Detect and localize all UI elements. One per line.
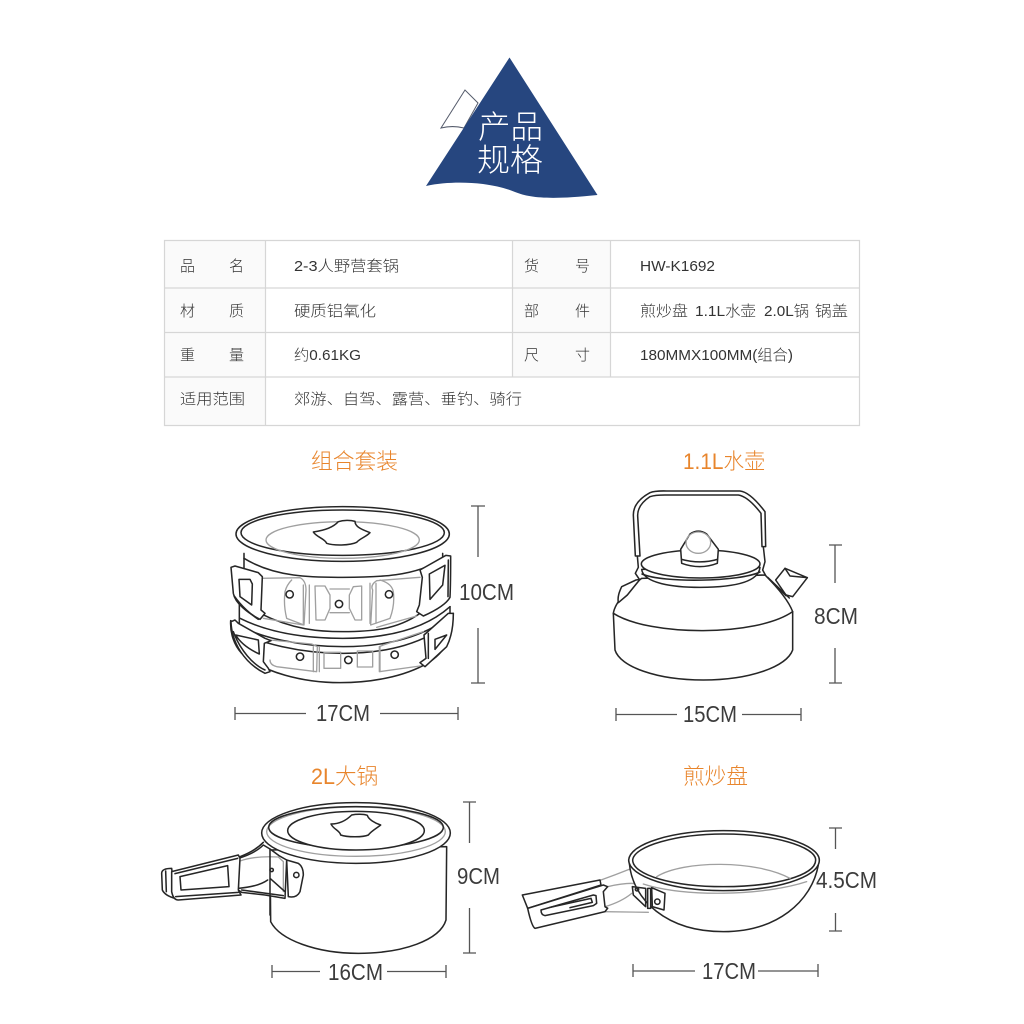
row: weight and size: 寸 (575, 347, 590, 364)
handle: pot folding handle (162, 842, 303, 915)
heading: kettle: 1.1L水壶 (683, 449, 765, 474)
pot rim (262, 803, 450, 863)
row: product name and item number: 号 (575, 258, 590, 275)
row: product name and item number (180, 258, 715, 275)
row: product name and item number: 品 (180, 258, 195, 275)
upper pot (231, 553, 451, 638)
row: material and parts: 硬质铝氧化 (294, 303, 376, 320)
dimension: kettle height (814, 545, 858, 683)
pan rim (629, 831, 819, 891)
panel: specification table (164, 240, 860, 426)
row: weight and size: 180MMX100MM(组合) (640, 347, 793, 364)
row: material and parts: 1.1L水壶 (695, 303, 756, 320)
row: weight and size (180, 347, 793, 364)
row: material and parts: 材 (180, 303, 195, 320)
row: weight and size: 尺 (524, 347, 539, 364)
rivets (286, 591, 393, 608)
row: material and parts: 锅盖 (815, 303, 848, 320)
dimension: kettle width (616, 701, 801, 727)
heading: combo set: 组合套装 (311, 449, 398, 474)
dimension: pan height (816, 828, 877, 931)
illustration: kettle (613, 491, 807, 680)
dimension: pot height (457, 802, 500, 953)
handle: lower left (231, 620, 271, 673)
pot body (270, 847, 447, 953)
kettle spout (776, 568, 807, 597)
heading: large pot: 2L大锅 (311, 764, 378, 789)
rivets (296, 651, 398, 664)
badge: mountain title (426, 58, 598, 198)
dimension: pan width: 17CM (702, 958, 756, 984)
icon: lid knob (313, 520, 370, 545)
row: product name and item number: 2-3人野营套锅 (294, 258, 399, 275)
handle: pan wire neck (601, 869, 652, 912)
kettle handle (633, 491, 767, 579)
row: material and parts: 质 (229, 303, 244, 320)
row: material and parts: 2.0L锅 (764, 303, 809, 320)
pan body (629, 863, 818, 932)
dimension: pot width (272, 959, 446, 985)
dimension: pot width: 16CM (328, 959, 383, 985)
dimension: pan width (633, 958, 818, 984)
lid (236, 507, 449, 561)
dimension: combo height: 10CM (459, 579, 514, 605)
kettle body (613, 575, 793, 680)
row: material and parts (180, 303, 848, 320)
row: material and parts: 煎炒盘 (640, 303, 688, 320)
title: 规格 (477, 142, 543, 178)
row: material and parts: 部 (524, 303, 539, 320)
handle: pan folding handle (522, 880, 665, 928)
row: applicable scope (180, 391, 522, 408)
handle: lower right (420, 613, 453, 667)
row: product name and item number: HW-K1692 (640, 258, 715, 275)
dimension: pan height: 4.5CM (816, 867, 877, 893)
kettle lid (641, 531, 760, 587)
title: 产品 (478, 109, 543, 145)
row: weight and size: 量 (229, 347, 244, 364)
illustration: combo set (231, 507, 453, 683)
row: product name and item number: 货 (524, 258, 539, 275)
icon: pot knob (331, 814, 381, 837)
illustration: frying pan (522, 831, 819, 932)
icon: lid knob (681, 531, 718, 567)
handle: upper left (231, 566, 265, 619)
dimension: kettle height: 8CM (814, 603, 858, 629)
icon: small outlined peak (441, 90, 478, 128)
dimension: combo width: 17CM (316, 700, 370, 726)
row: applicable scope: 适用范围 (180, 391, 245, 408)
pot lid (288, 811, 424, 850)
heading: frying pan: 煎炒盘 (683, 764, 748, 789)
dimension: combo height (459, 506, 514, 683)
row: material and parts: 件 (575, 303, 590, 320)
dimension: kettle width: 15CM (683, 701, 737, 727)
handle: upper right (417, 555, 451, 616)
dimension: pot height: 9CM (457, 863, 500, 889)
row: weight and size: 约0.61KG (294, 347, 361, 364)
kettle hinge (618, 579, 640, 603)
row: applicable scope: 郊游、自驾、露营、垂钓、骑行 (294, 391, 522, 408)
illustration: large pot (162, 803, 450, 953)
icon: blue mountain (426, 58, 598, 198)
title (477, 109, 543, 178)
row: product name and item number: 名 (229, 258, 244, 275)
lower pan (231, 605, 453, 683)
row: weight and size: 重 (180, 347, 195, 364)
dimension: combo width (235, 700, 458, 726)
